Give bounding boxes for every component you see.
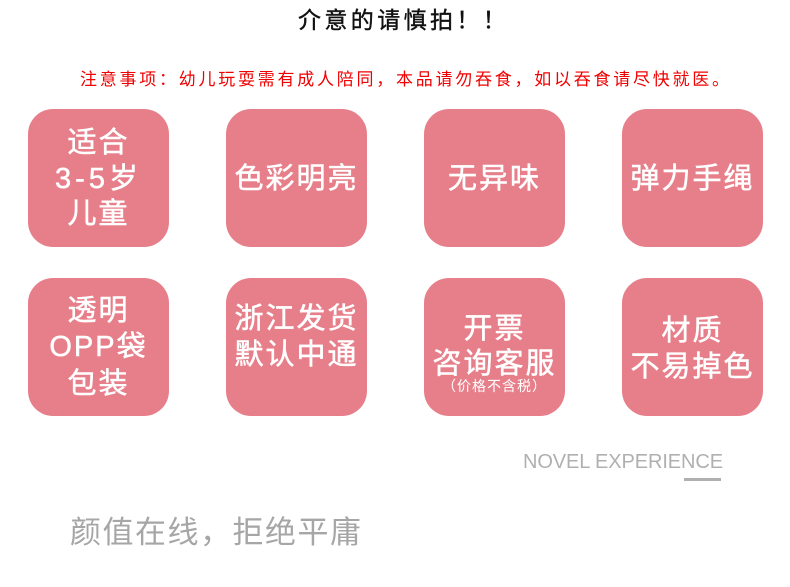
tile: colourfast material: 材质: [661, 315, 724, 347]
tile: shipping: [226, 278, 367, 416]
tile: OPP bag packaging: 透明: [67, 295, 130, 327]
tile: OPP bag packaging: 包装: [67, 368, 130, 400]
tile: elastic wrist cord: 弹力手绳: [630, 163, 754, 195]
chinese slogan: 颜值在线，拒绝平庸: [70, 515, 362, 550]
title: 介意的请慎拍！！: [298, 7, 509, 33]
tile: shipping: 默认中通: [234, 339, 358, 371]
tile: colourfast material: [622, 278, 763, 416]
tile: colourfast material: 不易掉色: [630, 351, 754, 383]
tile: OPP bag packaging: [28, 278, 169, 416]
tile: suitable age: 3-5岁: [55, 163, 142, 195]
tile: no odour: 无异味: [448, 163, 541, 195]
tile: bright colours: [226, 109, 367, 247]
english tagline: NOVEL EXPERIENCE: [523, 451, 723, 473]
tile: suitable age: [28, 109, 169, 247]
tile: suitable age: 适合: [67, 127, 130, 159]
tagline underline: [684, 478, 721, 481]
tile: elastic wrist cord: [622, 109, 763, 247]
tile: invoice: [424, 278, 565, 416]
tile: shipping: 浙江发货: [234, 303, 358, 335]
tile: bright colours: 色彩明亮: [234, 163, 358, 195]
tile: invoice: （价格不含税）: [442, 378, 547, 394]
tile: OPP bag packaging: OPP袋: [49, 331, 148, 363]
tile: invoice: 开票: [463, 313, 526, 345]
tile: no odour: [424, 109, 565, 247]
tile: invoice: 咨询客服: [432, 348, 556, 380]
tile: suitable age: 儿童: [67, 198, 130, 230]
safety notice: 注意事项：幼儿玩耍需有成人陪同，本品请勿吞食，如以吞食请尽快就医。: [80, 70, 732, 89]
